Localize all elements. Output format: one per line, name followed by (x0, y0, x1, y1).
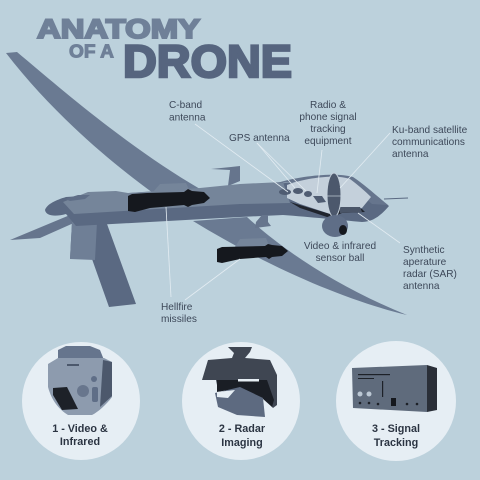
far wing (6, 52, 200, 193)
label: Hellfire missiles: missiles (161, 314, 197, 325)
icon: sensor ball (48, 346, 112, 415)
label: radio and phone signal tracking equipment: equipment (304, 136, 352, 147)
GPS and C-band antennas (279, 188, 326, 203)
caption: 1 - Video & (52, 423, 108, 435)
label: SAR antenna: aperature (403, 257, 447, 268)
near wing (193, 217, 407, 315)
label: GPS antenna: GPS antenna (229, 133, 290, 144)
landing gear (255, 215, 271, 228)
sensor ball (322, 215, 348, 237)
panel: radar imaging (182, 342, 300, 460)
title line: drone: DRONE (123, 36, 292, 87)
caption: 2 - Radar (219, 423, 266, 435)
label: Ku-band satellite communications antenna: communications (392, 137, 465, 148)
lower tail fin (70, 222, 136, 307)
label: radio and phone signal tracking equipment: Radio & (310, 100, 346, 111)
rear intake (65, 195, 90, 201)
wing pylon near (233, 238, 270, 250)
label: SAR antenna: antenna (403, 281, 440, 292)
panel: video and infrared (22, 342, 140, 460)
label: Ku-band satellite communications antenna: antenna (392, 149, 429, 160)
label: video and infrared sensor ball: sensor ball (316, 253, 364, 264)
title (37, 14, 292, 87)
title line: of a: OF A (69, 42, 114, 62)
missile lower (217, 244, 288, 263)
panel: signal tracking (336, 341, 456, 461)
radar bay (290, 202, 365, 218)
label: radio and phone signal tracking equipment: phone signal (299, 112, 357, 123)
label: SAR antenna: Synthetic (403, 245, 445, 256)
wing pylon far (153, 183, 190, 192)
icon: radar unit (202, 347, 277, 417)
caption: Imaging (221, 437, 263, 449)
missile upper (128, 189, 210, 212)
label: SAR antenna: radar (SAR) (403, 269, 457, 280)
caption: 3 - Signal (372, 423, 420, 435)
label: C-band antenna: C-band (169, 100, 202, 111)
top fin (211, 166, 240, 186)
nose probe (384, 198, 408, 199)
fuselage lower band (45, 182, 389, 226)
drone illustration (6, 52, 408, 315)
caption: Tracking (374, 437, 418, 449)
label: C-band antenna: antenna (169, 112, 206, 124)
left tail fin (10, 215, 76, 240)
caption: Infrared (60, 436, 100, 448)
canopy cut-away (287, 177, 371, 214)
SAR antenna (340, 207, 362, 213)
icon: equipment box (352, 365, 437, 412)
label: Ku-band satellite communications antenna: Ku-band satellite (392, 125, 468, 136)
label: video and infrared sensor ball: Video & infrared (304, 241, 376, 252)
Ku-band satellite dish (327, 173, 341, 217)
title line: anatomy: ANATOMY (37, 14, 200, 44)
label: Hellfire missiles: Hellfire (161, 302, 193, 313)
fuselage upper (63, 182, 290, 214)
nose upper (277, 175, 388, 205)
label: radio and phone signal tracking equipment: tracking (310, 124, 346, 135)
leader lines (166, 124, 400, 300)
